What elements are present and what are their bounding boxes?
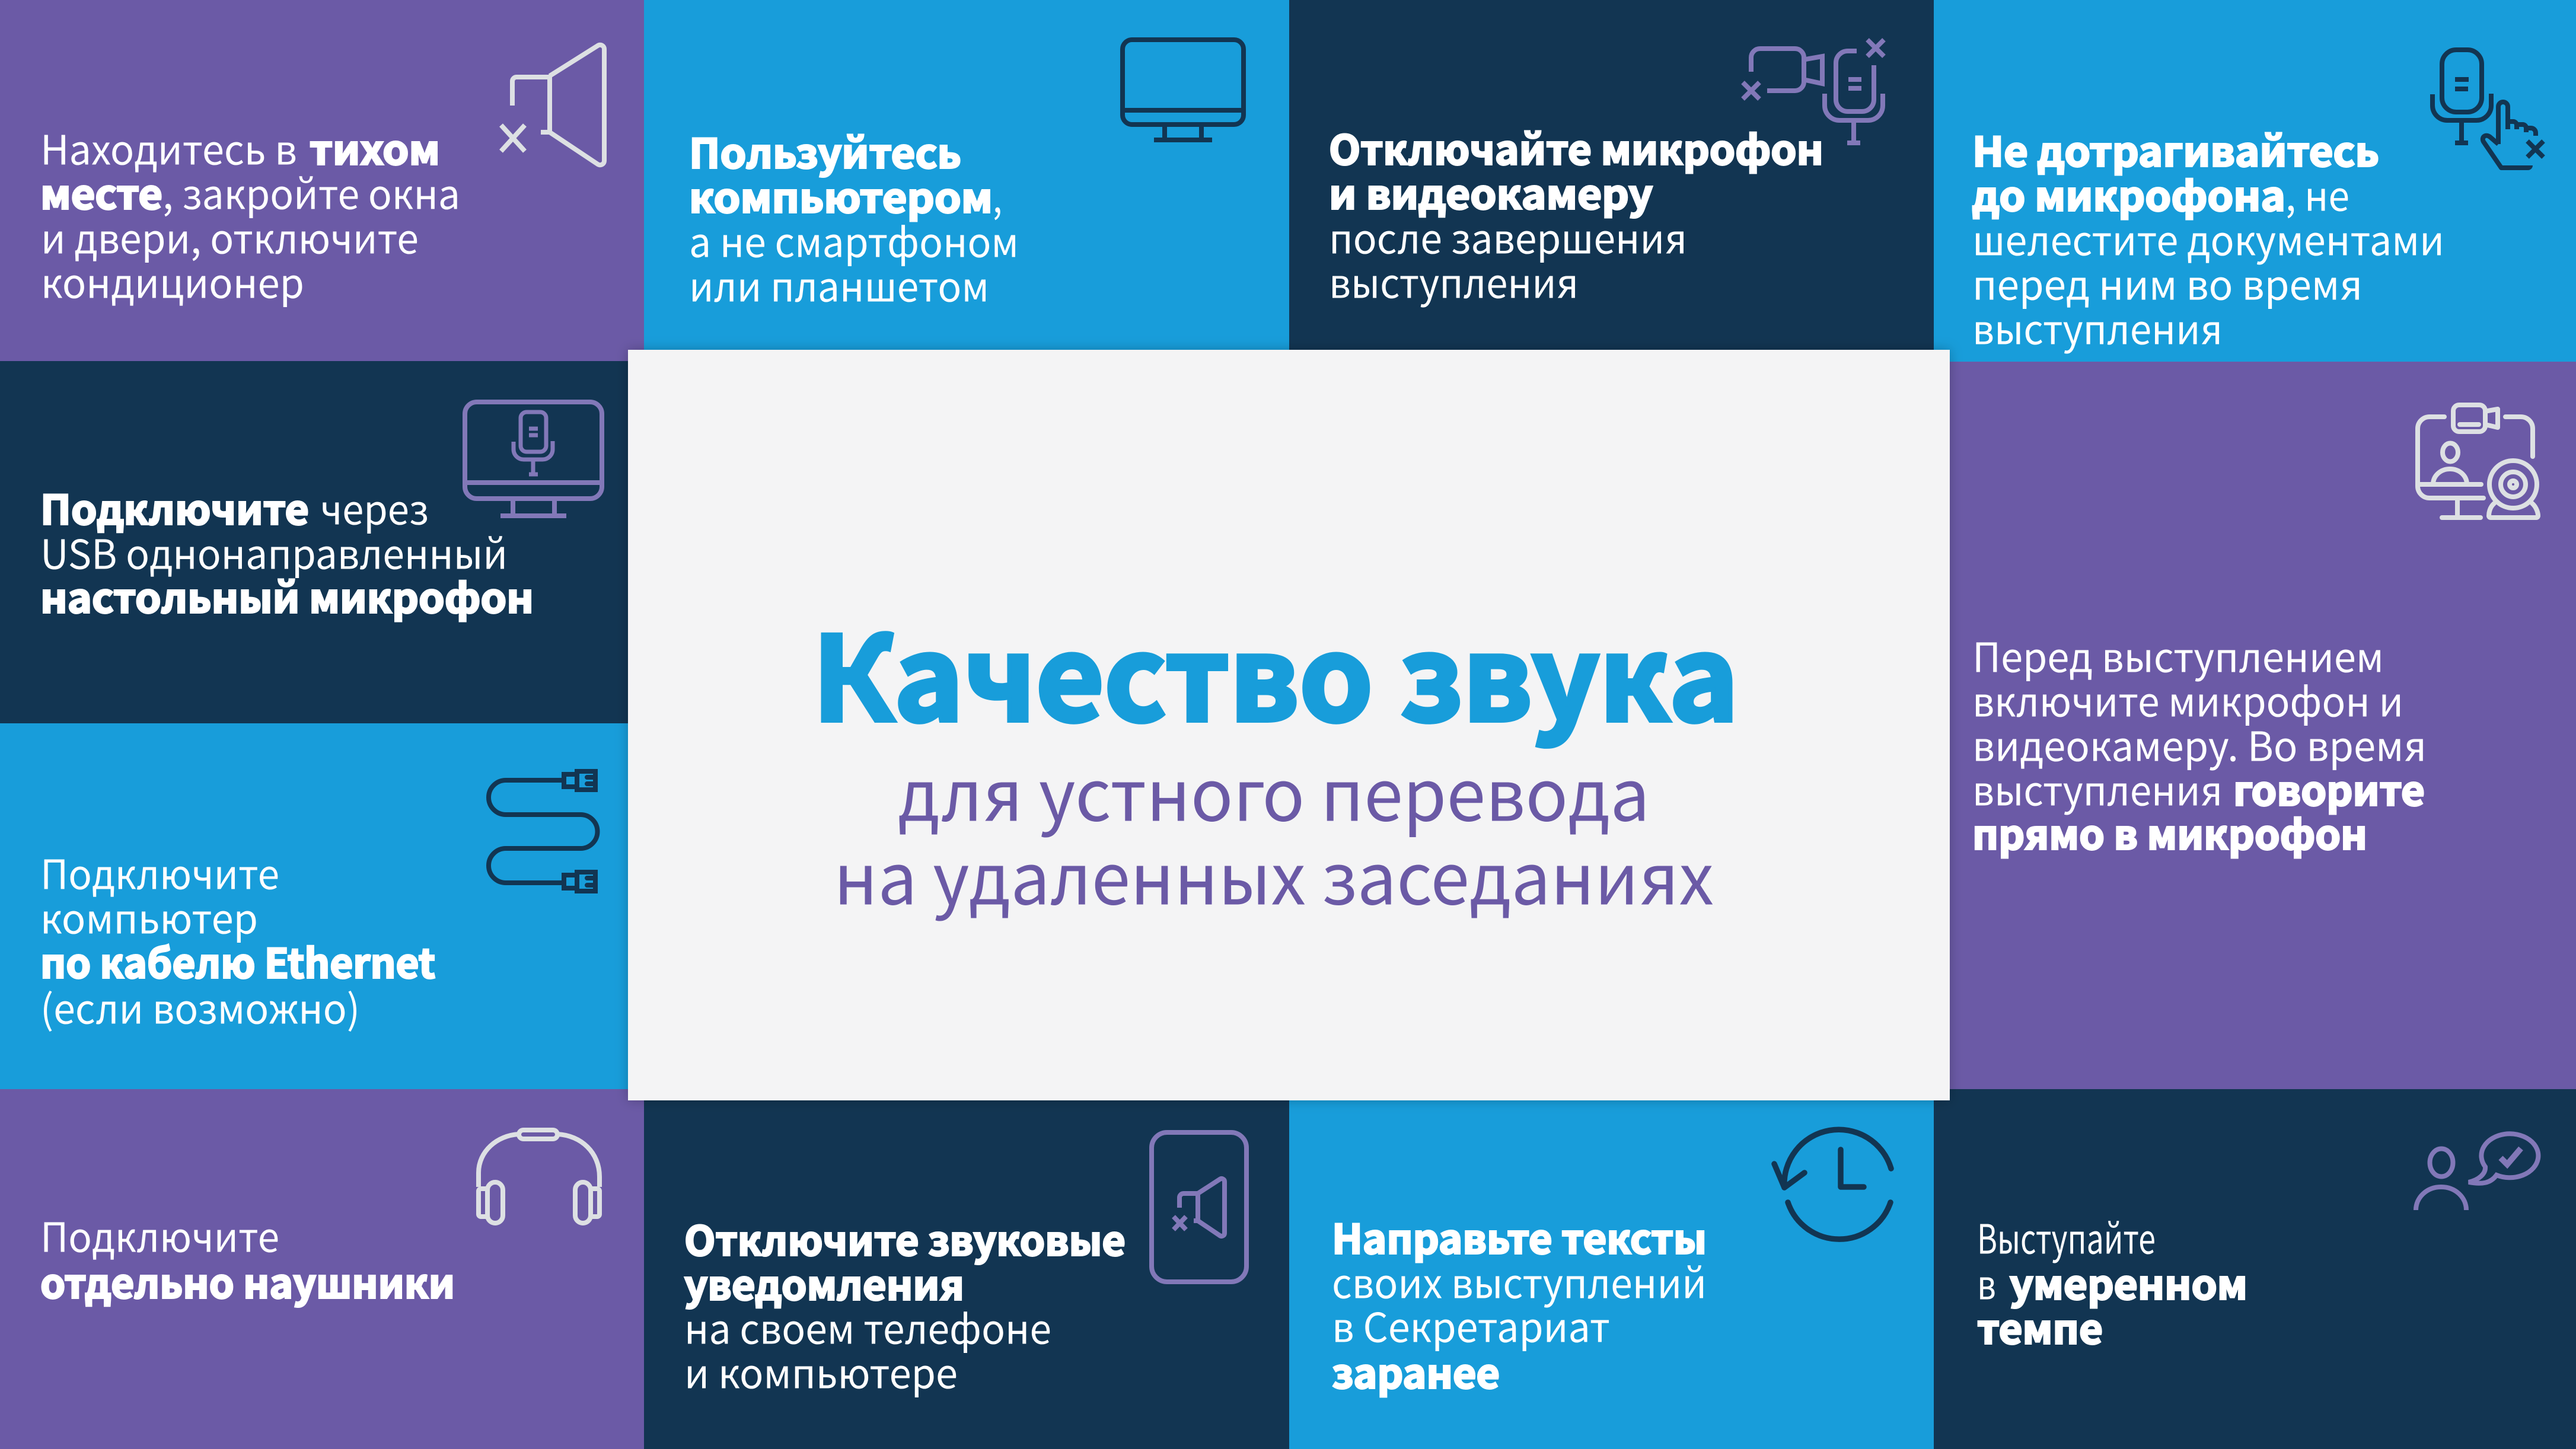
subtitle: для устного перевода: [898, 739, 1650, 842]
icon: clock with arrow: [1774, 1129, 1891, 1239]
panel: do not touch microphone: [1934, 0, 2576, 362]
text: desktop microphone: USB однонаправленный: [40, 522, 508, 581]
text: desktop microphone: настольный микрофон: [40, 566, 534, 625]
text: ethernet cable: [40, 842, 435, 1035]
text: use a computer: Пользуйтесь: [689, 121, 961, 180]
text: switch off microphone and camera: выступления: [1329, 251, 1579, 309]
text: switch off microphone and camera: и видеокамеру: [1329, 162, 1653, 221]
text: desktop microphone: через: [320, 478, 429, 536]
text: use a computer: компьютером: [689, 166, 993, 224]
text: quiet place: кондиционер: [41, 251, 304, 309]
icon: phone with muted speaker: [1152, 1132, 1246, 1282]
text: disable notifications: на своем телефоне: [684, 1297, 1051, 1355]
text: send texts in advance: заранее: [1332, 1341, 1500, 1400]
panel: moderate pace: [1934, 1089, 2576, 1449]
text: do not touch microphone: [1972, 120, 2444, 356]
text: speak directly into microphone: прямо в микрофон: [1972, 803, 2367, 861]
text: disable notifications: [684, 1208, 1126, 1400]
text: speak directly into microphone: говорите: [2233, 759, 2425, 817]
icon: monitor: [1123, 40, 1244, 140]
panel: ethernet cable: [0, 723, 652, 1089]
text: desktop microphone: Подключите: [40, 478, 309, 536]
text: moderate pace: в: [1977, 1252, 1996, 1311]
text: do not touch microphone: Не дотрагивайтесь: [1972, 120, 2379, 178]
icon: speaker with speech bubble: [2416, 1134, 2538, 1210]
text: send texts in advance: своих выступлений: [1332, 1251, 1707, 1310]
panel: speak directly into microphone: [1939, 362, 2576, 1089]
text: quiet place: , закройте окна: [162, 162, 460, 221]
text: headphones: Подключите: [40, 1205, 279, 1264]
text: quiet place: [40, 117, 460, 309]
subtitle: на удаленных заседаниях: [834, 822, 1714, 925]
panel: send texts in advance: [1289, 1091, 1934, 1449]
text: ethernet cable: (если возможно): [40, 977, 360, 1035]
text: headphones: [40, 1205, 455, 1310]
panel: quiet place: [0, 0, 644, 362]
text: moderate pace: умеренном: [2010, 1252, 2247, 1311]
text: use a computer: [689, 121, 1019, 313]
text: quiet place: месте: [40, 162, 162, 221]
text: speak directly into microphone: включите микрофон и: [1972, 670, 2403, 728]
text: disable notifications: и компьютере: [684, 1341, 958, 1400]
text: ethernet cable: компьютер: [40, 887, 258, 945]
text: do not touch microphone: шелестите документами: [1972, 209, 2444, 267]
text: moderate pace: темпе: [1977, 1297, 2103, 1355]
icon: monitor with microphone: [465, 402, 602, 516]
text: moderate pace: Выступайте: [1977, 1207, 2156, 1265]
text: speak directly into microphone: [1972, 625, 2427, 861]
text: quiet place: и двери, отключите: [41, 206, 419, 266]
panel: use a computer: [644, 0, 1289, 356]
icon: muted speaker: [501, 45, 604, 165]
icon: cable: [489, 771, 597, 891]
text: switch off microphone and camera: Отключайте микрофон: [1329, 117, 1823, 177]
text: disable notifications: Отключите звуковые: [684, 1208, 1126, 1268]
text: moderate pace: [1977, 1207, 2247, 1355]
panel: switch off microphone and camera: [1289, 0, 1934, 356]
text: quiet place: Находитесь в: [40, 117, 297, 177]
text: send texts in advance: Направьте тексты: [1332, 1207, 1707, 1265]
text: do not touch microphone: выступления: [1972, 298, 2223, 356]
text: send texts in advance: в Секретариат: [1332, 1295, 1610, 1354]
text: desktop microphone: [40, 478, 534, 625]
text: headphones: отдельно наушники: [40, 1251, 455, 1310]
text: send texts in advance: [1332, 1207, 1707, 1400]
text: do not touch microphone: , не: [2285, 164, 2349, 223]
icon: muted camera and microphone: [1743, 40, 1884, 143]
text: quiet place: тихом: [310, 117, 440, 177]
text: ethernet cable: Подключите: [40, 842, 279, 901]
text: speak directly into microphone: Перед выступлением: [1972, 625, 2384, 684]
icon: microphone and hand: [2432, 50, 2543, 168]
text: disable notifications: уведомления: [684, 1253, 964, 1311]
icon: headphones: [479, 1130, 600, 1223]
panel: desktop microphone: [0, 361, 652, 723]
text: ethernet cable: по кабелю Ethernet: [40, 931, 435, 990]
text: use a computer: ,: [993, 166, 1002, 224]
text: use a computer: или планшетом: [689, 255, 989, 313]
text: do not touch microphone: перед ним во время: [1972, 253, 2363, 312]
text: speak directly into microphone: видеокамеру. Во время: [1972, 714, 2427, 773]
title: Качество звука: [812, 587, 1739, 754]
panel: disable notifications: [644, 1091, 1289, 1449]
text: switch off microphone and camera: [1329, 117, 1823, 309]
text: do not touch microphone: до микрофона: [1972, 164, 2285, 223]
panel: central title card: [628, 350, 1950, 1100]
panel: headphones: [0, 1089, 644, 1449]
icon: webcam, camera, presenter: [2418, 405, 2538, 518]
text: switch off microphone and camera: после завершения: [1329, 206, 1687, 266]
text: speak directly into microphone: выступления: [1972, 759, 2223, 817]
subtitle: [834, 739, 1714, 925]
text: use a computer: а не смартфоном: [689, 210, 1019, 269]
